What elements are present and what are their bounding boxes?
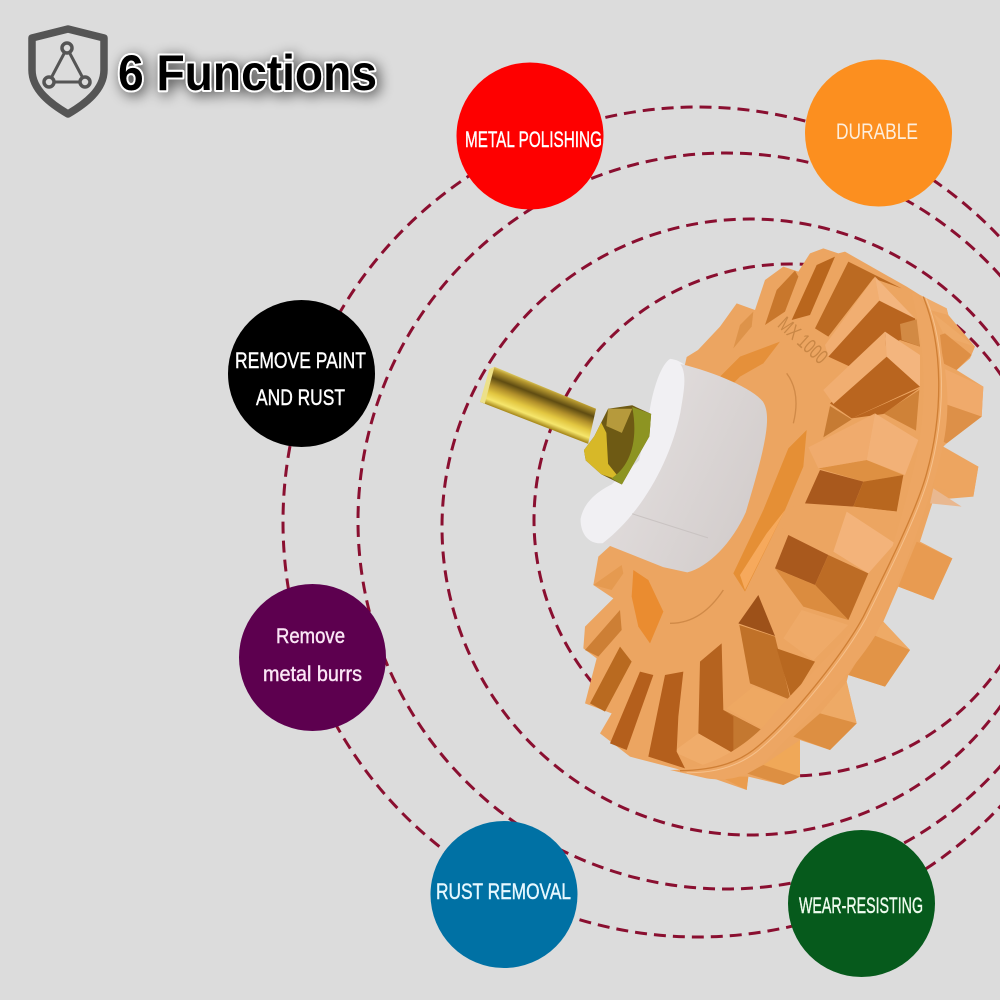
badge: durable: DURABLE: [836, 119, 918, 144]
wheel silhouette: [583, 248, 983, 790]
badge: remove metal burrs: Remove: [276, 625, 345, 648]
badge: wear-resisting: [788, 830, 935, 977]
badge: remove metal burrs: [239, 584, 386, 731]
brass head: [584, 405, 651, 485]
badge: rust removal: [430, 821, 578, 968]
badge: metal polishing: METAL POLISHING: [465, 127, 602, 152]
block tooth 5: [738, 595, 848, 700]
badge: wear-resisting: WEAR-RESISTING: [799, 893, 923, 918]
lower left grooves: [585, 565, 685, 768]
badge: metal polishing: [456, 62, 604, 210]
outer teeth behind rim: [720, 295, 983, 790]
arbor and felt: [480, 359, 767, 572]
dashed orbit rings: [283, 107, 1000, 937]
badge: remove paint and rust: AND RUST: [256, 385, 345, 410]
embossed text: MX 1000: [773, 313, 832, 369]
embossed markings: [670, 373, 796, 623]
badge: remove paint and rust: REMOVE PAINT: [235, 348, 366, 373]
rim band: [670, 293, 947, 779]
block tooth 3: [805, 413, 918, 512]
badge: durable: [805, 60, 952, 206]
badge: remove metal burrs: metal burrs: [263, 663, 362, 686]
title: 6 Functions: [118, 45, 377, 101]
hub slots: [632, 342, 807, 643]
badge: rust removal: RUST REMOVAL: [436, 879, 571, 904]
block tooth 2: [823, 332, 920, 437]
product: eraser wheel on arbor: [480, 248, 983, 790]
block tooth 4: [767, 505, 898, 620]
grooves between top teeth: [733, 257, 902, 348]
brass shaft: [480, 367, 596, 444]
felt cylinder: [581, 359, 767, 572]
rubber wheel: [583, 248, 983, 790]
block tooth 6: [673, 643, 792, 767]
icon: shield with triangle: [32, 29, 104, 114]
block tooth 1: [825, 277, 920, 367]
badge: remove paint and rust: [228, 300, 375, 447]
